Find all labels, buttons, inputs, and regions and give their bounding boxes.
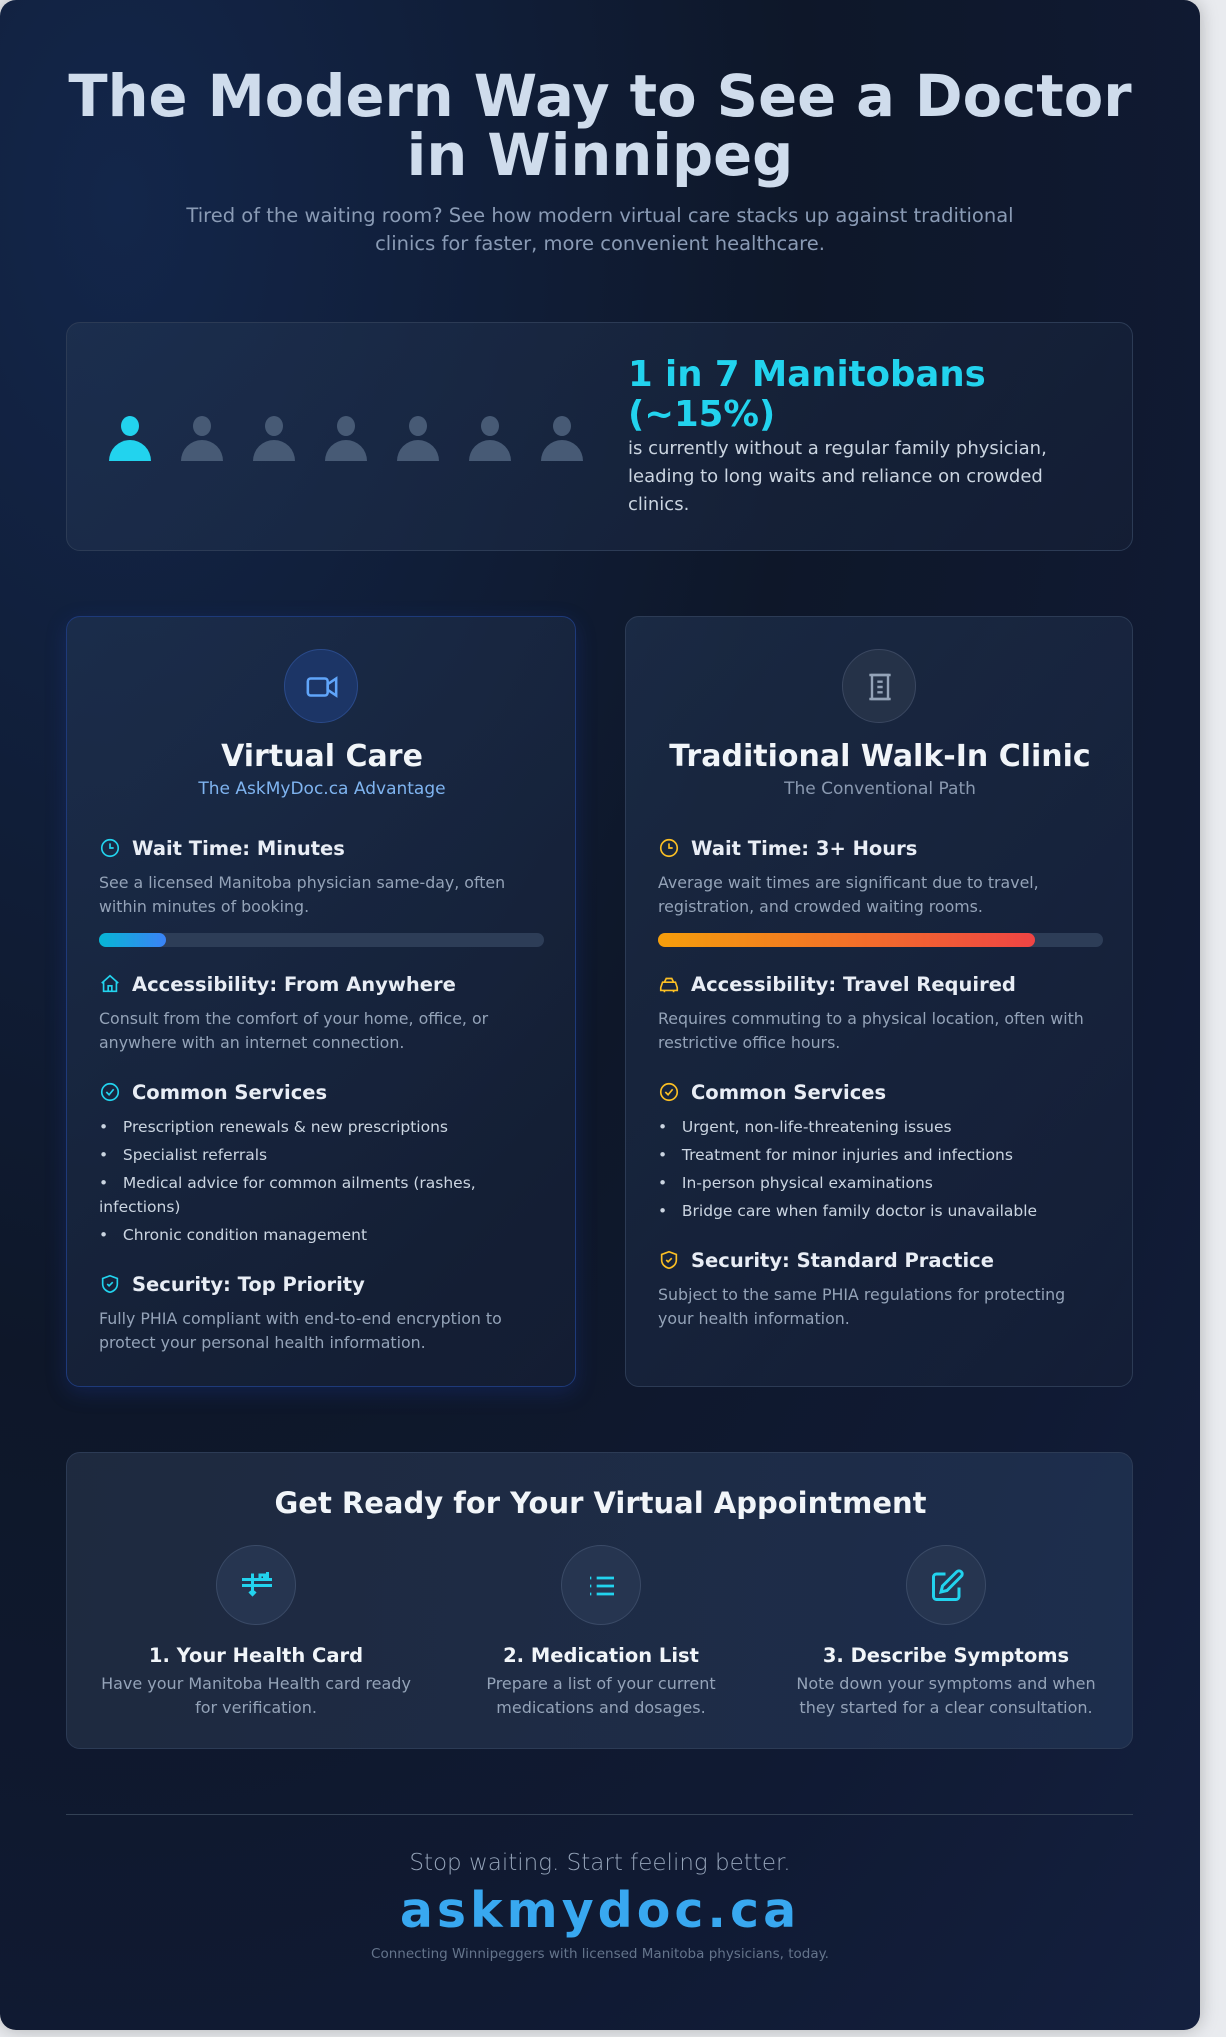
common services: • Chronic condition management xyxy=(99,1226,367,1244)
heading: Get Ready for Your Virtual Appointment xyxy=(274,1486,927,1520)
accessibility: Requires commuting to a physical location, often with restrictive office hours. xyxy=(658,1009,1084,1052)
stat heading: (~15%) xyxy=(628,394,775,435)
icon: pencil xyxy=(906,1545,986,1625)
wait time: Wait Time: 3+ Hours xyxy=(691,837,917,860)
step 2: 2. Medication List xyxy=(503,1644,699,1667)
panel: virtual care xyxy=(66,616,576,1387)
icon: video xyxy=(284,649,358,723)
common services: • Urgent, non-life-threatening issues xyxy=(658,1118,952,1136)
security xyxy=(658,1249,1065,1328)
icon: building xyxy=(842,649,916,723)
step 2 xyxy=(486,1545,716,1717)
panel: walk-in clinic xyxy=(625,616,1133,1387)
wait time xyxy=(99,837,544,947)
heading: Virtual Care xyxy=(221,739,423,774)
title: The Modern Way to See a Doctor xyxy=(68,63,1132,130)
common services: • Treatment for minor injuries and infections xyxy=(658,1146,1013,1164)
step 2: Prepare a list of your current medications and dosages. xyxy=(486,1674,716,1717)
footer brand: askmydoc.ca xyxy=(400,1882,800,1939)
footer tagline: Stop waiting. Start feeling better. xyxy=(409,1850,791,1876)
accessibility: Accessibility: From Anywhere xyxy=(132,973,456,996)
step 1: 1. Your Health Card xyxy=(149,1644,363,1667)
security: Security: Top Priority xyxy=(132,1273,365,1296)
common services: • In-person physical examinations xyxy=(658,1174,933,1192)
accessibility xyxy=(99,973,488,1052)
common services: • Specialist referrals xyxy=(99,1146,267,1164)
common services: • Prescription renewals & new prescriptions xyxy=(99,1118,448,1136)
wait time: Wait Time: Minutes xyxy=(132,837,345,860)
common services: Common Services xyxy=(691,1081,886,1104)
step 1: Have your Manitoba Health card ready for verification. xyxy=(101,1674,411,1717)
stat heading xyxy=(628,354,986,435)
accessibility xyxy=(658,973,1084,1052)
common services xyxy=(99,1081,476,1244)
icon: people row xyxy=(109,416,583,461)
title: in Winnipeg xyxy=(407,122,793,189)
icon: list xyxy=(561,1545,641,1625)
panel: virtual care: The AskMyDoc.ca Advantage xyxy=(198,779,446,799)
title xyxy=(68,63,1132,189)
security: Subject to the same PHIA regulations for protecting your health information. xyxy=(658,1285,1065,1328)
stat text: is currently without a regular family physician, leading to long waits and reliance on crowded clinics. xyxy=(628,438,1047,515)
security xyxy=(99,1273,502,1352)
wait time: Average wait times are significant due to travel, registration, and crowded waiting rooms. xyxy=(658,873,1039,916)
footer note: Connecting Winnipeggers with licensed Manitoba physicians, today. xyxy=(371,1946,829,1962)
common services: Common Services xyxy=(132,1081,327,1104)
wait time xyxy=(658,837,1103,947)
accessibility: Consult from the comfort of your home, office, or anywhere with an internet connection. xyxy=(99,1009,488,1052)
heading: Traditional Walk-In Clinic xyxy=(669,739,1091,774)
step 3 xyxy=(796,1545,1096,1717)
stat heading: 1 in 7 Manitobans xyxy=(628,354,986,395)
panel: walk-in clinic: The Conventional Path xyxy=(784,779,976,799)
panel: statistic xyxy=(66,322,1133,551)
security: Fully PHIA compliant with end-to-end encryption to protect your personal health information. xyxy=(99,1309,502,1352)
panel: get ready xyxy=(66,1452,1133,1749)
step 3: Note down your symptoms and when they started for a clear consultation. xyxy=(796,1674,1096,1717)
subtitle: Tired of the waiting room? See how modern virtual care stacks up against traditional clinics for faster, more convenient healthcare. xyxy=(186,204,1014,255)
security: Security: Standard Practice xyxy=(691,1249,994,1272)
step 1 xyxy=(101,1545,411,1717)
wait time: See a licensed Manitoba physician same-day, often within minutes of booking. xyxy=(99,873,505,916)
icon: health card xyxy=(216,1545,296,1625)
common services: • Bridge care when family doctor is unavailable xyxy=(658,1202,1037,1220)
common services: • Medical advice for common ailments (rashes, infections) xyxy=(99,1174,476,1216)
common services xyxy=(658,1081,1037,1220)
step 3: 3. Describe Symptoms xyxy=(823,1644,1069,1667)
accessibility: Accessibility: Travel Required xyxy=(691,973,1016,996)
